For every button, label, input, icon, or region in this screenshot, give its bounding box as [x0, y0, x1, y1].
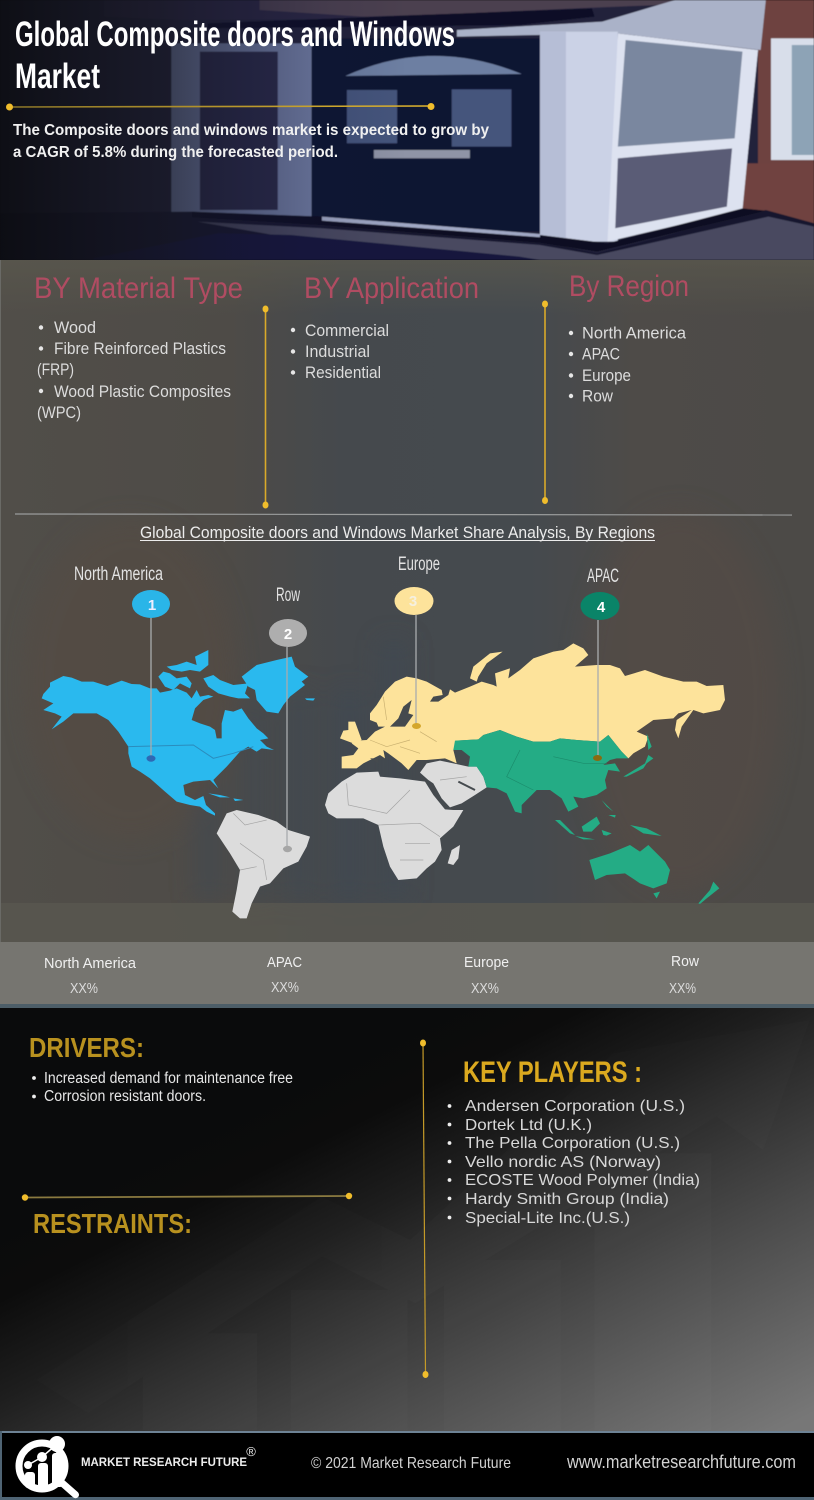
share table [0, 942, 814, 1008]
intro text: a CAGR of 5.8% during the forecasted period. [13, 144, 338, 161]
map pin 4: apac: APAC [587, 566, 619, 587]
list: key players: ECOSTE Wood Polymer (India) [465, 1172, 700, 1189]
title [15, 15, 455, 96]
list: material types [37, 318, 231, 422]
map pin 2: row: Row [276, 585, 300, 606]
list: key players: The Pella Corporation (U.S.) [465, 1135, 680, 1152]
map pin 1: north america [74, 564, 170, 762]
copyright: © 2021 Market Research Future [311, 1455, 511, 1472]
divider: material and application [262, 306, 268, 508]
map pin 3: europe [394, 554, 440, 729]
list: key players: Andersen Corporation (U.S.) [465, 1098, 685, 1115]
list: drivers: Increased demand for maintenance free [44, 1070, 293, 1087]
list: regions [569, 324, 687, 406]
share: row: XX% [669, 980, 696, 997]
icon: market research future logo [19, 1436, 78, 1495]
share: apac [267, 954, 302, 996]
title divider [6, 103, 434, 110]
registered mark: ® [246, 1444, 256, 1459]
title: Market [15, 57, 100, 96]
list: regions: Europe [582, 366, 631, 385]
map pin 2: row: 2 [284, 626, 292, 643]
footer bar [0, 1431, 814, 1500]
map pin 1: north america: North America [74, 564, 163, 585]
panel: drivers, restraints and key players [0, 1008, 814, 1431]
heading: restraints: RESTRAINTS: [33, 1208, 192, 1239]
list: key players: Dortek Ltd (U.K.) [465, 1117, 592, 1134]
share: europe [464, 954, 509, 997]
share: north america [44, 955, 137, 997]
list: material types: (FRP) [37, 360, 74, 379]
heading: by material type: BY Material Type [34, 272, 243, 305]
share: row: Row [671, 953, 699, 970]
divider: application and region [542, 300, 548, 504]
list: key players: Special-Lite Inc.(U.S.) [465, 1210, 630, 1227]
divider: drivers and key players [420, 1040, 428, 1378]
panel: by material type [34, 272, 243, 422]
list: applications: Industrial [305, 342, 370, 361]
list: regions: North America [582, 324, 687, 342]
intro text: The Composite doors and windows market is expected to grow by [13, 122, 489, 139]
panel: by region [569, 270, 689, 406]
list: key players [448, 1098, 700, 1227]
panel: segmentation and map background [0, 260, 814, 1005]
brand name: MARKET RESEARCH FUTURE [81, 1455, 247, 1469]
list: material types: Fibre Reinforced Plastics [54, 339, 226, 358]
heading: drivers: DRIVERS: [29, 1032, 144, 1063]
list: key players: Vello nordic AS (Norway) [465, 1154, 661, 1171]
region: africa and middle east [325, 761, 487, 880]
map pin 3: europe: 3 [409, 593, 417, 610]
share: north america: North America [44, 955, 137, 972]
region: north america [42, 650, 315, 816]
map pin 3: europe: Europe [398, 554, 440, 575]
list: regions: APAC [582, 344, 620, 364]
list: material types: Wood Plastic Composites [54, 382, 231, 401]
list: key players: Hardy Smith Group (India) [465, 1191, 669, 1208]
map pin 4: apac [580, 566, 620, 761]
map pin 2: row [269, 585, 307, 852]
divider: drivers and restraints [22, 1193, 352, 1201]
list: applications: Residential [305, 363, 381, 382]
heading: by application: BY Application [304, 272, 479, 305]
panel: by application [291, 272, 479, 382]
heading: by region: By Region [569, 270, 689, 303]
world map [42, 643, 725, 918]
region: asia pacific [453, 730, 719, 904]
intro text [13, 122, 489, 161]
header photo: composite door and bay window [0, 0, 814, 260]
share: north america: XX% [70, 980, 98, 997]
list: regions: Row [582, 386, 614, 406]
map heading: Global Composite doors and Windows Market Share Analysis, By Regions [140, 523, 655, 542]
list: material types: Wood [54, 318, 96, 337]
share: europe: Europe [464, 954, 509, 971]
list: applications: Commercial [305, 321, 389, 340]
region: europe and russia [340, 643, 725, 770]
list: drivers: Corrosion resistant doors. [44, 1088, 206, 1105]
list: drivers [32, 1070, 293, 1105]
title: Global Composite doors and Windows [15, 15, 455, 54]
website: www.marketresearchfuture.com [566, 1452, 796, 1472]
heading: key players: KEY PLAYERS : [463, 1056, 642, 1089]
list: applications [291, 321, 389, 382]
share: apac: XX% [271, 979, 299, 996]
share: row [669, 953, 699, 997]
region: south america [217, 810, 310, 918]
map pin 4: apac: 4 [597, 599, 606, 616]
list: material types: (WPC) [37, 403, 81, 422]
map pin 1: north america: 1 [148, 597, 156, 614]
share: apac: APAC [267, 954, 302, 971]
share: europe: XX% [471, 980, 499, 997]
